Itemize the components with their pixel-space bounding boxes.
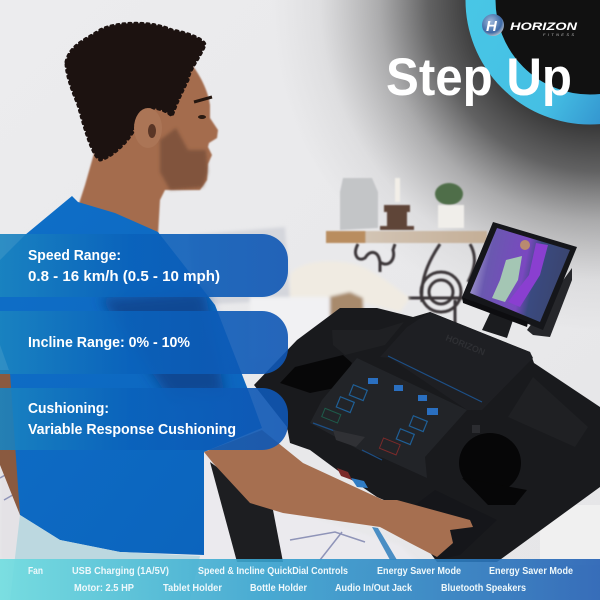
treadmill leg — [210, 462, 283, 562]
runner on tablet — [492, 240, 530, 302]
cushion — [190, 227, 290, 305]
logo H mark: H — [486, 18, 498, 35]
tablet lip — [462, 297, 528, 327]
tablet — [462, 222, 577, 337]
fur throw — [290, 261, 410, 315]
bottom feature strip — [0, 559, 600, 600]
cushions and fur throw — [190, 227, 410, 360]
speed and incline buttons — [336, 385, 427, 445]
feature list row 2: Bottle Holder — [250, 583, 307, 594]
lower blue rail — [372, 527, 397, 560]
bedding — [250, 297, 330, 360]
plant pot — [438, 205, 464, 228]
blue shirt — [0, 196, 262, 555]
feature list row 1 — [28, 566, 573, 577]
speaker grille — [333, 430, 365, 447]
speed range text: 0.8 - 16 km/h (0.5 - 10 mph) — [28, 269, 220, 285]
blue grip strip — [351, 478, 368, 488]
tablet rear case — [527, 268, 572, 337]
screen swirl — [508, 243, 548, 307]
eye — [198, 115, 206, 119]
speed range text — [28, 248, 220, 285]
wrought iron legs — [356, 244, 474, 325]
lower quick-dial pad — [415, 490, 497, 560]
red grip strip — [337, 468, 352, 480]
spec band: incline range — [0, 311, 288, 374]
keypad blue trim — [313, 356, 482, 460]
eyebrow — [194, 97, 212, 102]
cyan ring — [480, 0, 600, 110]
rug — [0, 450, 420, 565]
feature list row 1: USB Charging (1A/5V) — [72, 566, 169, 577]
logo badge — [482, 14, 504, 36]
cushioning text: Cushioning: — [28, 401, 109, 417]
cushioning text — [28, 401, 236, 438]
jug — [340, 178, 378, 230]
brand mark: HORIZON — [444, 333, 486, 357]
feature list row 2 — [74, 583, 526, 594]
treadmill console — [254, 308, 600, 562]
candle — [395, 178, 400, 202]
feature list row 2: Tablet Holder — [163, 583, 222, 594]
crate — [324, 292, 363, 318]
forearm and hand — [204, 430, 473, 557]
man's left arm — [0, 370, 20, 515]
beard — [160, 128, 208, 190]
feature list row 1: Energy Saver Mode — [489, 566, 573, 577]
upper brand panel — [380, 312, 533, 410]
feature list row 2: Motor: 2.5 HP — [74, 583, 134, 594]
dark corner gradient — [260, 0, 600, 340]
tablet screen — [470, 228, 570, 322]
feature list row 2: Audio In/Out Jack — [335, 583, 412, 594]
right bottle holder — [459, 433, 527, 505]
logo wordmark: HORIZON — [510, 21, 578, 33]
incline range text: Incline Range: 0% - 10% — [28, 335, 190, 351]
feature list row 1: Fan — [28, 566, 43, 577]
right side tray — [508, 377, 588, 447]
cushioning text: Variable Response Cushioning — [28, 422, 236, 438]
table top — [326, 231, 487, 243]
feature list row 2: Bluetooth Speakers — [441, 583, 526, 594]
plant — [435, 183, 463, 205]
keypad panel — [310, 358, 467, 478]
USB port — [472, 425, 480, 433]
left side tray — [332, 322, 404, 355]
man — [0, 23, 473, 600]
tablet holder stem — [482, 313, 513, 338]
shorts — [10, 515, 200, 600]
feature list row 1: Speed & Incline QuickDial Controls — [198, 566, 348, 577]
man's neck and face — [72, 62, 218, 235]
tablet frame — [462, 222, 577, 330]
feature list row 1: Energy Saver Mode — [377, 566, 461, 577]
speed range text: Speed Range: — [28, 248, 121, 264]
candle holder — [380, 205, 414, 230]
side table with jug, candle and plant — [326, 178, 487, 325]
man's hair — [66, 23, 205, 160]
display digits — [368, 378, 438, 415]
start button — [322, 408, 341, 423]
shirt shading — [100, 290, 225, 400]
ear — [134, 108, 162, 148]
console body — [254, 308, 600, 562]
logo subtitle: FITNESS — [543, 32, 574, 37]
spec band: cushioning — [0, 388, 288, 450]
logo — [482, 14, 578, 37]
stop button — [379, 438, 400, 455]
spec band: speed range — [0, 234, 288, 297]
title: Step Up — [386, 48, 572, 107]
left bottle holder — [280, 355, 352, 393]
